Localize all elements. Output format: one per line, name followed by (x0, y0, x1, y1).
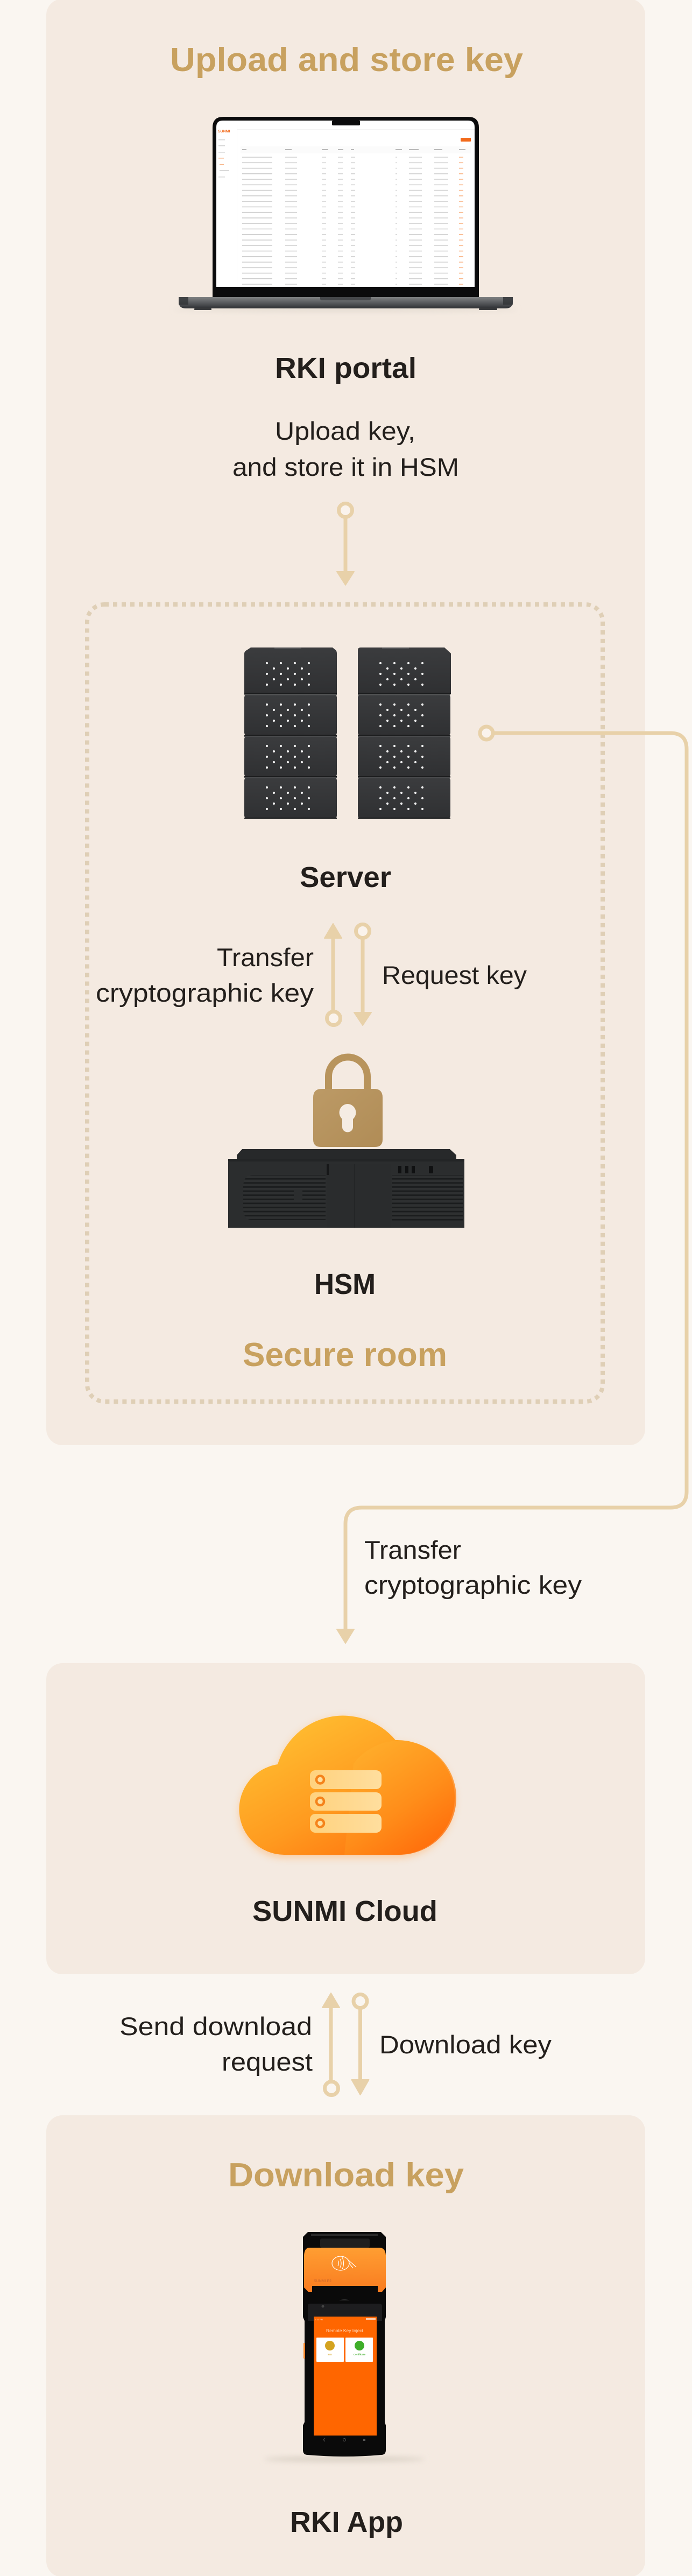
icon: SUNMI handheld terminal: 2:16 PM (315, 2318, 323, 2321)
text: transfer cryptographic key to cloud: cryptographic key (364, 1571, 582, 1599)
text: upload key and store it in HSM (232, 417, 459, 481)
icon: SUNMI handheld terminal: Certificate (354, 2353, 365, 2356)
text: request key: Request key (382, 961, 527, 989)
label: RKI App: RKI App (290, 2506, 403, 2538)
text: upload key and store it in HSM: Upload key, (275, 417, 415, 445)
icon: orange cloud with server bars (239, 1716, 456, 1858)
icon: HSM device (228, 1149, 464, 1228)
label: SUNMI Cloud: SUNMI Cloud (252, 1895, 437, 1927)
text: transfer cryptographic key: cryptographic key (96, 979, 314, 1007)
heading: upload and store key: Upload and store key (170, 41, 524, 79)
arrow: download key down (352, 1995, 369, 2095)
text: transfer cryptographic key to cloud (364, 1536, 582, 1599)
text: send download request: request (222, 2047, 313, 2076)
text: send download request: Send download (119, 2012, 312, 2040)
text: send download request (119, 2012, 313, 2076)
panel: download key (46, 2115, 645, 2576)
text: transfer cryptographic key: Transfer (217, 943, 314, 972)
panel: secure room boundary (87, 604, 603, 1402)
text: transfer cryptographic key to cloud: Transfer (364, 1536, 461, 1564)
panel: upload and store key (46, 0, 645, 1445)
arrow: transfer cryptographic key up (324, 924, 342, 1025)
label: RKI portal: RKI portal (275, 352, 416, 384)
label: HSM: HSM (314, 1268, 376, 1300)
arrow: request key down (354, 925, 371, 1025)
panel: SUNMI Cloud (46, 1663, 645, 1974)
icon: laptop with RKI portal: SUNMI (218, 130, 230, 133)
icon: SUNMI handheld terminal: Remote Key Inject (326, 2328, 364, 2333)
text: transfer cryptographic key (96, 943, 314, 1007)
icon: server racks (244, 647, 451, 819)
icon: SUNMI handheld terminal: SUNMI P2 (314, 2279, 331, 2283)
icon: SUNMI handheld terminal (264, 2232, 425, 2462)
heading: download key: Download key (228, 2157, 464, 2194)
icon: laptop with RKI portal (173, 117, 518, 311)
heading: secure room: Secure room (243, 1336, 447, 1374)
arrow: server to SUNMI Cloud connector (337, 727, 687, 1643)
arrow: send download request up (322, 1993, 340, 2095)
text: download key: Download key (379, 2030, 552, 2059)
arrow: portal to secure room (337, 504, 354, 585)
icon: padlock (313, 1057, 383, 1147)
label: server: Server (300, 861, 391, 893)
text: upload key and store it in HSM: and store it in HSM (232, 453, 459, 481)
icon: SUNMI handheld terminal: EKI (328, 2353, 332, 2356)
